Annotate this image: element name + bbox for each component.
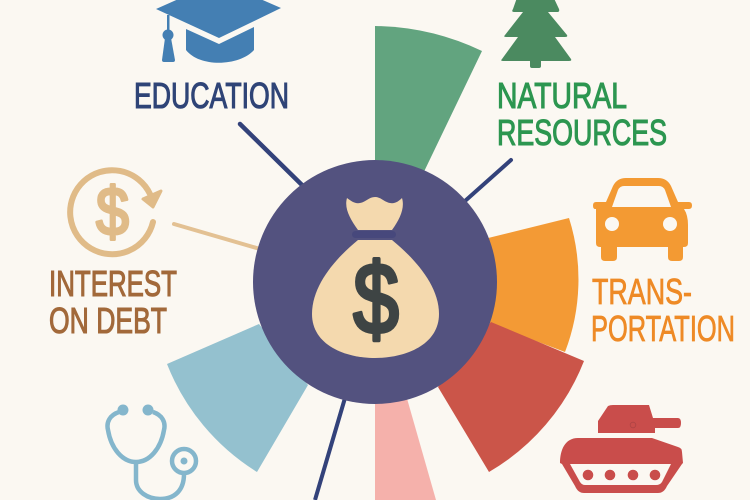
connector: natural resources [465,160,511,201]
icon: stethoscope [107,404,196,499]
icon: pine tree [501,0,571,68]
icon: interest cycle: $ [96,173,129,250]
wedge: natural resources [375,26,482,180]
label: transportation: TRANS- [592,271,692,312]
label: education: EDUCATION [134,75,289,116]
connector: education [240,124,302,185]
label: natural resources: RESOURCES [497,112,667,153]
label: interest on debt [49,263,177,341]
label: natural resources: NATURAL [497,75,627,116]
connector: interest on debt [174,224,260,249]
wedge: defense [438,322,584,472]
wedge: transportation [480,218,578,352]
dollar sign: $ [353,243,399,355]
label: interest on debt: ON DEBT [49,300,167,341]
icon: graduation cap [156,0,281,63]
icon: tank [560,405,683,493]
connector: bottom [315,398,345,500]
wedge: healthcare [167,324,308,472]
center circle with money bag [253,160,497,404]
icon: car [593,178,692,261]
icon: money bag [312,197,439,358]
label: interest on debt: INTEREST [49,263,177,304]
label: natural resources [497,75,667,153]
label: transportation [591,271,735,349]
wedge: pink [375,395,436,500]
icon: interest cycle [70,170,161,254]
